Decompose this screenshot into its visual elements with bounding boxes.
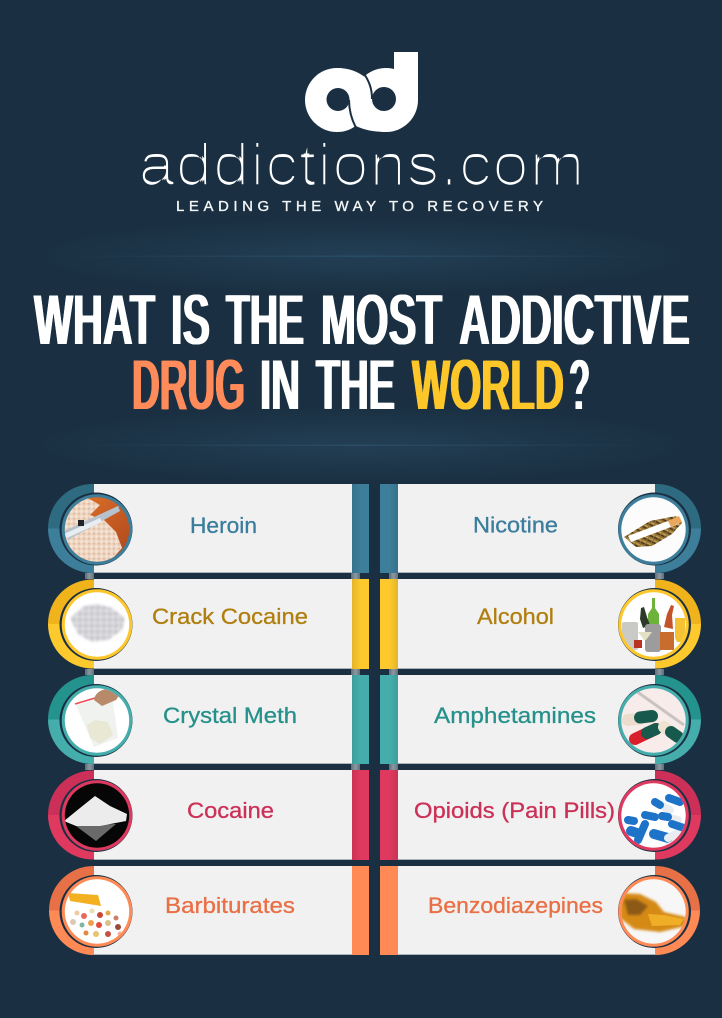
icon: amber softgels xyxy=(618,876,690,948)
label: Cocaine: Cocaine xyxy=(187,798,274,823)
panel: Alcohol xyxy=(380,579,701,669)
label: Crack Cocaine: Crack Cocaine xyxy=(152,604,308,629)
panel: Heroin xyxy=(48,484,369,573)
panel: Opioids xyxy=(380,770,701,860)
icon: infinity ad mark xyxy=(305,52,418,133)
icon: cocaine pile on black xyxy=(60,780,134,852)
title xyxy=(34,280,690,426)
icon: blue and white pills xyxy=(618,780,690,852)
tagline: LEADING THE WAY TO RECOVERY xyxy=(176,198,543,215)
brand name: addictions.com xyxy=(138,132,585,198)
panel: Cocaine xyxy=(48,770,369,860)
icon: heroin powder and syringe xyxy=(60,494,134,566)
label: Barbiturates: Barbiturates xyxy=(165,893,295,918)
title: DRUG xyxy=(132,345,245,426)
icon: alcohol bottles and glasses xyxy=(618,589,690,661)
panel: Crack Cocaine xyxy=(48,579,369,669)
title: IS xyxy=(171,280,210,361)
title: WORLD xyxy=(412,345,564,426)
icon: spilled pill bottle xyxy=(60,876,134,948)
icon: cigarette on tobacco xyxy=(618,494,690,566)
title: THE xyxy=(316,345,395,426)
label: Heroin: Heroin xyxy=(190,513,257,538)
title: ? xyxy=(569,345,590,426)
label: Benzodiazepines: Benzodiazepines xyxy=(428,893,603,918)
panel: Crystal Meth xyxy=(48,675,369,764)
panel: Barbiturates xyxy=(49,866,369,955)
label: Opioids (Pain Pills): Opioids (Pain Pills) xyxy=(414,798,615,823)
panel: Amphetamines xyxy=(380,675,701,764)
label: Nicotine: Nicotine xyxy=(473,512,558,538)
icon: bag of crystal meth xyxy=(60,685,134,757)
icon: white powder pile xyxy=(60,589,134,661)
title: WHAT xyxy=(34,280,155,361)
panel: Nicotine xyxy=(380,484,701,573)
label: Alcohol: Alcohol xyxy=(477,604,554,629)
panel: Benzodiazepines xyxy=(380,866,700,955)
logo: addictions.com brand block xyxy=(138,52,585,215)
label: Crystal Meth: Crystal Meth xyxy=(163,703,297,728)
icon: capsules xyxy=(618,685,690,757)
title: IN xyxy=(260,345,300,426)
title: THE xyxy=(226,280,304,361)
label: Amphetamines: Amphetamines xyxy=(434,703,596,728)
connectors between rows xyxy=(85,573,664,770)
title: MOST xyxy=(321,280,442,361)
